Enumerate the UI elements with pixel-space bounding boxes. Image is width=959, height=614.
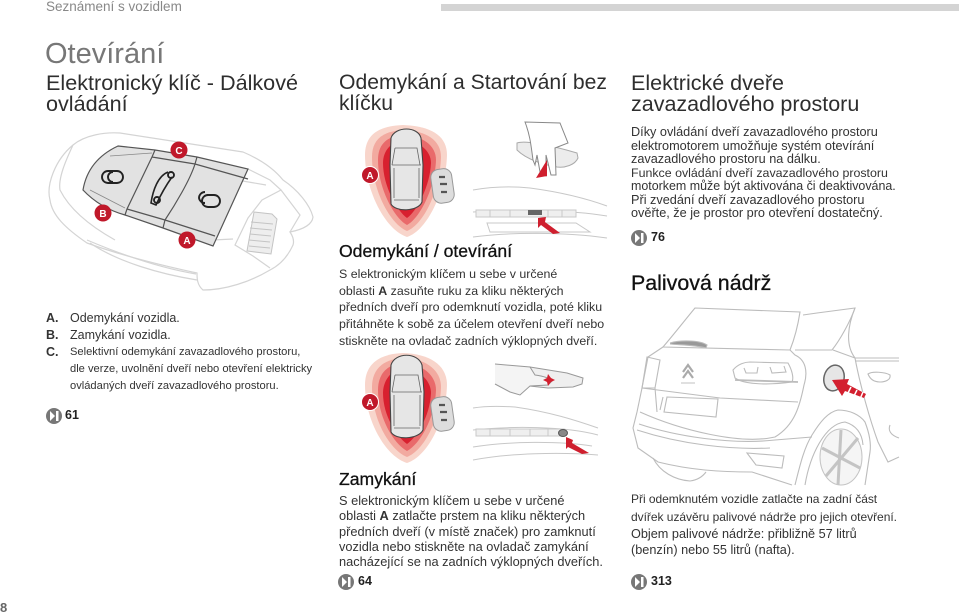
text: fuel: (benzín) nebo 55 litrů (nafta). [631,543,795,557]
text: unlocking: stiskněte na ovladač zadních výklopných dveří. [339,334,597,348]
illustration: tailgate control top [473,187,607,238]
car wheel [820,429,862,485]
reference 61 [46,408,79,424]
list: button legend: Zamykání vozidla. [70,328,171,342]
illustration: tailgate control bottom [473,406,598,460]
heading: electric tailgate [631,71,859,116]
reference 76 [631,230,665,246]
reference 313: 313 [651,574,672,588]
list: button legend [46,311,312,392]
text: locking: S elektronickým klíčem u sebe v určené [339,493,564,508]
heading: keyless: klíčku [339,92,393,114]
reference 61: 61 [65,408,79,422]
item C [46,345,312,392]
text: electric tailgate: Funkce ovládání dveří zavazadlového prostoru [631,166,888,180]
reference 64 [338,574,372,590]
text: fuel: Při odemknutém vozidle zatlačte na zadní část [631,492,877,506]
text: electric tailgate: elektromotorem umožňuje systém otevírání [631,138,874,152]
heading: electric tailgate: Elektrické dveře [631,71,784,95]
text: unlocking: přitáhněte k sobě za účelem otevření dveří nebo [339,317,604,331]
item A: A. [46,311,58,325]
text: locking: vozidla nebo stiskněte na ovladač zamykání [339,539,589,554]
heading: keyless: Odemykání a Startování bez [339,71,607,94]
heading: remote key [46,70,298,116]
text: electric tailgate: ověřte, že je prostor pro otevření dostatečný. [631,206,883,220]
reference 64: 64 [358,574,372,588]
key icons [102,171,220,207]
key vent [247,212,277,254]
illustration: unlocking zones top: A [366,171,374,182]
subheading: locking: Zamykání [339,469,416,489]
item C: C. [46,345,58,359]
text: locking: předních dveří (v místě značek) pro zamknutí [339,524,596,539]
subheading: unlocking: Odemykání / otevírání [339,241,512,261]
text: locking [339,493,603,569]
heading: fuel tank: Palivová nádrž [631,271,771,295]
text: unlocking: oblasti A zasuňte ruku za kliku některých [339,284,564,298]
list: button legend: ovládaných dveří zavazadlového prostoru. [70,380,279,392]
heading: keyless [339,71,607,114]
reference 76: 76 [651,230,665,244]
list: button legend: Odemykání vozidla. [70,311,180,325]
red callouts key: B [99,209,107,220]
key buttons panel [83,146,248,246]
item B [46,328,171,342]
text: locking: nacházející se na zadních výklopných dveřích. [339,554,603,569]
heading: remote key: Elektronický klíč - Dálkové [46,70,298,95]
text: electric tailgate: Díky ovládání dveří zavazadlového prostoru [631,125,878,139]
citroen logo [681,365,695,383]
heading: remote key: ovládání [46,90,128,116]
heading: electric tailgate: zavazadlového prostoru [631,92,859,116]
text: electric tailgate: motorkem může být aktivována či deaktivována. [631,179,896,193]
red callouts key: A [183,236,191,247]
item B: B. [46,328,58,342]
text: electric tailgate [631,125,896,220]
text: electric tailgate: Při zvedání dveří zavazadlového prostoru [631,192,864,206]
illustration: locking zones bottom [362,353,455,463]
text: fuel: Objem palivové nádrže: přibližně 57 litrů [631,527,857,541]
illustration: locking zones bottom: A [366,398,374,409]
illustration: remote key [49,133,313,290]
list: button legend: dle verze, uvolnění dveří nebo otevření elektricky [70,363,312,375]
text: fuel [631,492,897,557]
text: unlocking [339,267,604,348]
item A [46,311,180,325]
title: Otevírání [45,38,164,70]
illustration: unlocking zones top [362,125,455,237]
reference 313 [631,574,672,590]
red callouts key: C [175,146,183,157]
text: unlocking: předních dveří pro odemknutí vozidla, poté kliku [339,300,602,314]
header bar [441,4,959,11]
text: unlocking: S elektronickým klíčem u sebe v určené [339,267,557,281]
fuel flap [821,363,866,399]
red callouts key [94,142,196,248]
text: locking: oblasti A zatlačte prstem na kliku některých [339,508,585,523]
illustration: rear of car with fuel flap [633,308,899,485]
list: button legend: Selektivní odemykání zavazadlového prostoru, [70,346,300,358]
illustration: finger on door handle [495,364,583,395]
text: electric tailgate: zavazadlového prostoru na dálku. [631,152,821,166]
text: fuel: dvířek uzávěru palivové nádrže pro jejich otevření. [631,510,897,524]
illustration: hand on door handle [517,122,578,178]
